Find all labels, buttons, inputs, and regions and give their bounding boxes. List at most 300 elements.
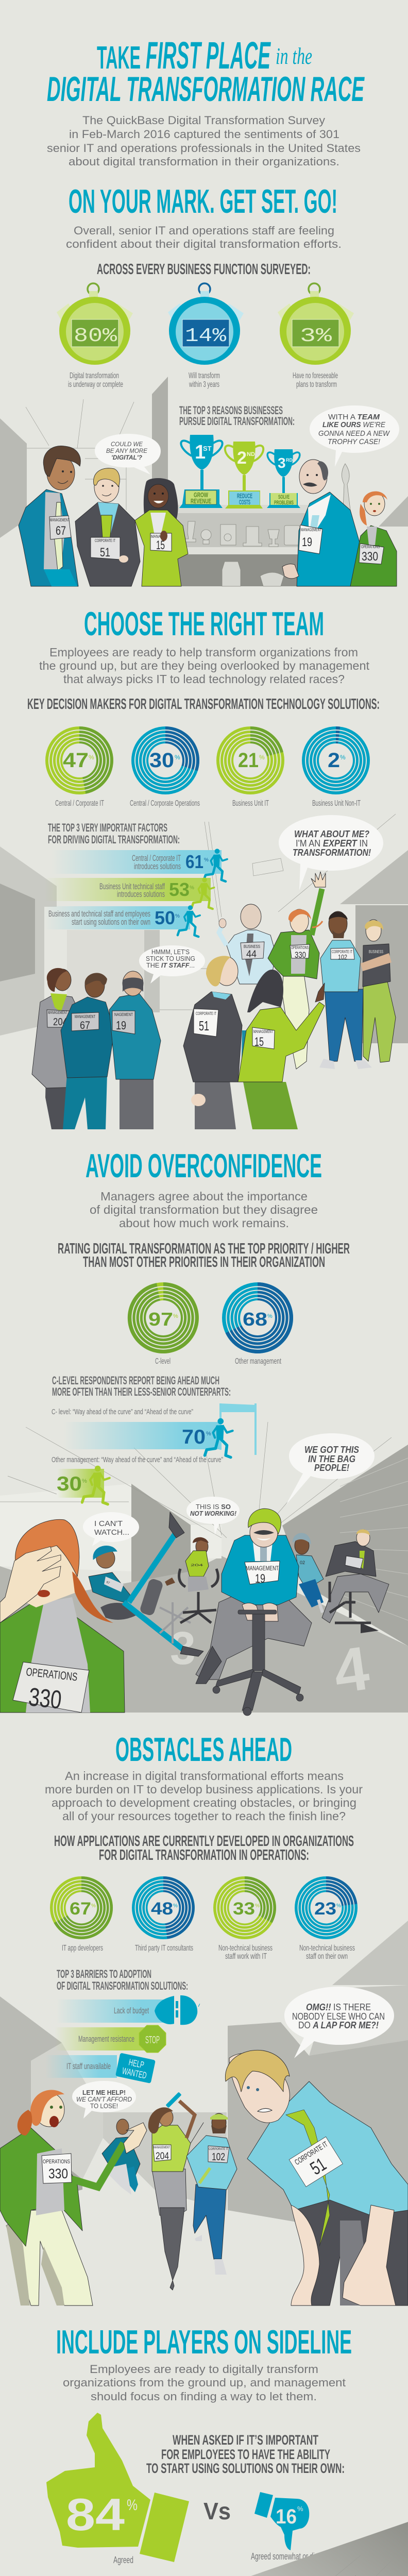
chart: priority donuts <box>128 1282 293 1366</box>
badge 19 <box>299 525 322 554</box>
badge 44: 44 <box>246 949 257 960</box>
badge 51 <box>194 1009 218 1037</box>
bar: other management 30 percent: % <box>82 1478 87 1484</box>
donut labels: Business Unit Non-IT <box>312 799 361 808</box>
heading: top 3 reasons <box>179 404 295 428</box>
character: falling racer 67: 67 <box>106 1581 110 1585</box>
badge 19 <box>245 1561 280 1586</box>
text block: employees ready: Employees are ready to help transform organizations from <box>49 646 358 659</box>
badge 15 <box>150 533 172 552</box>
speech bubble: so not working: NOT WORKING! <box>190 1510 236 1517</box>
bar: business unit 53 percent: Business Unit technical staff <box>99 882 165 891</box>
panel: office chair race illustration <box>0 1403 408 1716</box>
speech bubble: can't watch: I CAN'T <box>94 1519 123 1528</box>
thumb labels: Agreed <box>113 2555 133 2565</box>
thumb labels: Agreed somewhat or disagreed <box>251 2551 337 2562</box>
badge 44 <box>241 942 264 960</box>
stopwatch 80 percent: 80% <box>74 325 117 347</box>
character: back view 204 <box>32 968 78 1129</box>
donut 30 percent: % <box>175 754 180 761</box>
corridor background <box>0 1422 408 1713</box>
badge 204: 204 <box>156 2151 169 2162</box>
badge 44: BUSINESS <box>244 944 260 949</box>
title: FIRST PLACE <box>146 34 271 77</box>
badge 67 <box>49 516 71 539</box>
donut 33 percent: % <box>255 1903 260 1909</box>
badge 330: 330 <box>295 950 306 960</box>
donut 47 percent: % <box>89 754 94 761</box>
bar: other management 30 percent <box>52 1455 223 1504</box>
badge 19: MANAGEMENT <box>301 528 321 532</box>
badge 330: OPERATIONS <box>361 545 380 549</box>
floor number three: 3 <box>170 1623 196 1674</box>
donut 2 percent: 2 <box>328 749 340 772</box>
icon: thumbs up 84 percent: % <box>127 2497 138 2514</box>
character: manager 19 <box>282 460 362 586</box>
badge 51: 51 <box>100 546 110 560</box>
character: racer 102 <box>293 1533 324 1613</box>
bar: central IT 61 percent: Central / Corporate IT <box>132 853 181 863</box>
text block: employees digitally transform: should focus on finding a way to let them. <box>91 2390 317 2403</box>
speech bubble: stick to IT staff: STICK TO USING <box>146 955 195 962</box>
speech bubble: team like ours <box>310 405 399 467</box>
bar: central IT 61 percent: % <box>204 857 209 863</box>
stopwatch 3 percent: 3% <box>300 325 332 347</box>
text block: managers agree: of digital transformation but they disagree <box>90 1203 318 1216</box>
donut 48 percent: 48 <box>151 1899 173 1919</box>
speech bubble: OMG: OMG!! IS THERE <box>306 2002 371 2012</box>
badge 330: 330 <box>27 1682 63 1715</box>
donut 97 percent <box>128 1282 199 1353</box>
character: racer 102: 02 <box>300 1560 305 1565</box>
character: back view 51 <box>183 956 242 1129</box>
trophy 2nd: 2 <box>237 448 247 468</box>
bar: business unit 53 percent: % <box>190 885 194 891</box>
stopwatch labels <box>68 371 338 389</box>
speech bubble: team like ours: LIKE OURS WE'RE <box>322 420 386 429</box>
character: racer 204: 204 <box>191 1564 204 1567</box>
character: back view 15 <box>238 970 325 1129</box>
donut 2 percent <box>302 726 370 794</box>
speech bubble: got this in the bag <box>286 1433 375 1505</box>
bar: lack of budget: Lack of budget <box>114 2006 149 2015</box>
bar: management resistance <box>55 2025 166 2053</box>
speech bubble: let me help <box>72 2081 136 2119</box>
stopwatch labels: is underway or complete <box>68 380 123 389</box>
application labels: staff on their own <box>306 1952 348 1961</box>
donut labels <box>55 799 361 808</box>
badge 19: 19 <box>116 1019 126 1032</box>
subheading: rating digital transformation <box>58 1241 350 1270</box>
badge 330: OPERATIONS <box>43 2159 70 2165</box>
badge 51: CORPORATE IT <box>293 2140 329 2167</box>
badge 67 <box>72 1012 99 1031</box>
character: operations 330 waving <box>268 872 326 1069</box>
badge 19: 19 <box>302 535 312 549</box>
heading: C-level respondents <box>52 1374 231 1398</box>
priority labels <box>155 1357 281 1366</box>
trophy 2nd <box>225 442 263 509</box>
speech bubble: so not working <box>186 1497 240 1535</box>
subheading: how applications are developed <box>54 1833 354 1863</box>
bar: C-level 70 percent: 70 <box>182 1426 206 1448</box>
badge 19: 19 <box>255 1572 265 1586</box>
donut 68 percent: 68 <box>243 1309 267 1330</box>
donut 23 percent <box>295 1876 358 1939</box>
bar: employees 50 percent: % <box>175 913 180 919</box>
donut 23 percent: % <box>336 1903 341 1909</box>
character: manager 44 <box>219 904 276 1082</box>
heading: top 3 barriers: TOP 3 BARRIERS TO ADOPTION <box>57 1968 151 1980</box>
subheading: when asked: WHEN ASKED IF IT’S IMPORTANT <box>173 2432 318 2448</box>
application labels <box>62 1944 355 1961</box>
thumb labels <box>113 2551 337 2565</box>
intro text block: The QuickBase Digital Transformation Survey <box>82 114 325 127</box>
donut 97 percent: % <box>173 1313 178 1319</box>
badge 19: MANAGEMENT <box>246 1565 279 1572</box>
icon: thumbs down 16 percent: 16 <box>276 2505 297 2528</box>
lounge background <box>11 2522 408 2576</box>
icon: help wanted sign <box>115 2053 156 2083</box>
icon: help wanted sign: WANTED <box>121 2065 147 2081</box>
speech bubble: stick to IT staff: THE IT STAFF... <box>146 962 195 969</box>
speech bubble: stick to IT staff <box>139 945 205 984</box>
panel: trophy room illustration <box>0 377 408 586</box>
icon: thumbs up 84 percent: 84 <box>66 2489 125 2540</box>
badge 330 <box>290 944 310 960</box>
badge 330: OPERATIONS <box>25 1665 78 1683</box>
badge 204: MANAGEMENT <box>154 2146 170 2149</box>
intro text block: in Feb-March 2016 captured the sentiments of 301 <box>69 128 339 141</box>
bar: C-level 70 percent <box>52 1403 257 1458</box>
title <box>47 34 365 109</box>
heading: top 3 factors: FOR DRIVING DIGITAL TRANSFORMATION: <box>48 833 180 846</box>
panel: office illustration with factors <box>0 814 408 1129</box>
speech bubble: can't watch: WATCH... <box>94 1528 129 1537</box>
character: racer 204 with baton <box>148 2092 203 2290</box>
text block: managers agree: Managers agree about the importance <box>100 1190 308 1203</box>
speech bubble: could we: BE ANY MORE <box>106 447 148 454</box>
stopwatch 14 percent <box>168 283 244 365</box>
heading: top 3 factors: THE TOP 3 VERY IMPORTANT FACTORS <box>48 821 167 834</box>
badge 204: 204 <box>53 1016 67 1028</box>
badge 67: MANAGEMENT <box>75 1014 95 1019</box>
room background <box>0 377 408 586</box>
character: manager 67 <box>19 446 80 586</box>
character: business 117 <box>361 920 396 1062</box>
icon: thumbs up 84 percent <box>46 2413 189 2562</box>
speech bubble: what about me <box>279 815 383 890</box>
donut 33 percent <box>213 1876 276 1939</box>
speech bubble: let me help: TO LOSE! <box>90 2102 118 2110</box>
badge 51 <box>91 537 120 560</box>
text block: managers agree: about how much work remains. <box>119 1216 289 1230</box>
heading: top 3 reasons: THE TOP 3 REASONS BUSINESSES <box>179 404 283 417</box>
icon: blue runner <box>204 849 227 882</box>
subheading: when asked <box>146 2432 345 2476</box>
bar: employees 50 percent: 50 <box>155 907 175 928</box>
panel: relay race illustration with barriers <box>0 1921 408 2306</box>
speech bubble: so not working: THIS IS SO <box>196 1503 231 1511</box>
character: corporate IT 102 <box>319 911 372 1069</box>
character: small racer 67 <box>102 2119 140 2195</box>
trophy 1st <box>179 435 223 508</box>
bar: employees 50 percent <box>44 905 200 937</box>
heading: top 3 reasons: PURSUE DIGITAL TRANSFORMATION: <box>179 415 295 428</box>
badge 19 <box>112 1011 135 1034</box>
application labels: staff work with IT <box>225 1952 267 1961</box>
donut labels: Central / Corporate Operations <box>130 799 200 808</box>
character: business 117: BUSINESS <box>369 950 383 954</box>
stopwatch labels: Have no foreseeable <box>293 371 338 380</box>
text block: employees digitally transform: Employees are ready to digitally transform <box>90 2363 318 2376</box>
trophy 1st: ST <box>203 445 212 452</box>
icon: green runner <box>82 1466 110 1504</box>
speech bubble: team like ours: TROPHY CASE! <box>328 437 381 446</box>
application labels: Non-technical business <box>299 1944 355 1953</box>
donut 47 percent <box>45 726 113 794</box>
donut 23 percent: 23 <box>314 1899 336 1919</box>
speech bubble: got this in the bag: IN THE BAG <box>308 1454 355 1464</box>
character: manager 15 <box>135 478 188 586</box>
intro text block: about digital transformation in their organizations. <box>69 155 339 168</box>
character: racer 102 with baton <box>186 2113 237 2275</box>
priority labels: C-level <box>155 1357 171 1366</box>
bar: business unit 53 percent: 53 <box>169 879 190 900</box>
speech bubble: OMG: DO A LAP FOR ME?! <box>298 2020 379 2030</box>
badge 15: 15 <box>254 1035 264 1049</box>
trophy 1st: REVENUE <box>191 497 211 505</box>
badge 204 <box>153 2145 171 2162</box>
badge 330: 330 <box>362 550 378 564</box>
bar: C-level 70 percent: % <box>206 1431 211 1437</box>
donut 21 percent <box>216 726 284 794</box>
text block: employees ready <box>39 646 370 686</box>
donut 33 percent: 33 <box>233 1899 255 1919</box>
bar: business unit 53 percent <box>44 877 214 909</box>
badge 51 <box>289 2137 343 2187</box>
heading: C-level respondents: C-LEVEL RESPONDENTS REPORT BEING AHEAD MUCH <box>52 1374 219 1387</box>
title: TAKE <box>97 40 141 76</box>
stopwatch labels: plans to transform <box>296 380 337 389</box>
character: corporate IT 51 <box>75 468 140 586</box>
trophy 1st: GROW <box>194 491 208 499</box>
heading: top 3 barriers <box>57 1968 188 1992</box>
badge 15: 15 <box>156 538 165 552</box>
text block: confidence: confident about their digital transformation efforts. <box>66 238 342 250</box>
chart: agreement thumbs <box>46 2413 337 2565</box>
finish line banner <box>219 1403 257 1455</box>
speech bubble: team like ours: GONNA NEED A NEW <box>318 429 390 438</box>
intro text block: senior IT and operations professionals in the United States <box>47 142 361 155</box>
bar: business unit 53 percent: introduces solutions <box>117 889 165 899</box>
chart: application development donuts <box>50 1876 358 1961</box>
badge 67: 67 <box>80 1020 90 1031</box>
donut 68 percent <box>222 1282 293 1353</box>
priority labels: Other management <box>235 1357 281 1366</box>
speech bubble: team like ours: WITH A TEAM <box>328 413 380 421</box>
text block: employees ready: the ground up, but are they being overlooked by management <box>39 659 370 672</box>
speech bubble: let me help: WE CAN'T AFFORD <box>76 2095 132 2103</box>
icon: blue runner <box>205 1418 233 1458</box>
icon: stop sign: STOP <box>145 2035 160 2046</box>
character: back view 19 <box>109 971 161 1129</box>
badge 330 <box>42 2154 72 2183</box>
text block: employees ready: that always picks IT to lead technology related races? <box>63 672 345 686</box>
text block: obstacles: approach to development creating obstacles, or bringing <box>52 1796 356 1809</box>
badge 15: MANAGE <box>151 534 165 539</box>
icon: broken piggy bank <box>155 1995 200 2025</box>
hallway background <box>0 1921 408 2241</box>
badge 102: 102 <box>338 953 347 961</box>
character: racer 19 <box>196 1509 312 1716</box>
text block: confidence <box>66 224 342 250</box>
bar: central IT 61 percent: introduces solutions <box>134 861 181 871</box>
character: operations 330 <box>350 492 397 586</box>
character: racer 51 <box>322 1529 389 1633</box>
donut 48 percent <box>132 1876 195 1939</box>
trophy 2nd: REDUCE <box>237 492 252 500</box>
text block: employees digitally transform: organizations from the ground up, and management <box>63 2376 346 2389</box>
text block: obstacles: An increase in digital transformational efforts means <box>65 1769 344 1783</box>
panel: sideline illustration <box>0 2522 408 2576</box>
trophy 1st: 1 <box>195 442 206 463</box>
badge 15 <box>252 1027 275 1049</box>
character: operations 330 covering face <box>0 1519 125 1715</box>
icon: stop sign <box>139 2025 166 2053</box>
donut 68 percent: % <box>267 1313 273 1319</box>
badge 67: 67 <box>56 524 66 538</box>
icon: blue runner <box>178 905 200 937</box>
badge 51: CORPORATE IT <box>95 538 115 543</box>
badge 102 <box>331 948 354 961</box>
speech bubble: what about me: I'M AN EXPERT IN <box>296 838 368 849</box>
floor number four: 4 <box>330 1633 373 1706</box>
donut 21 percent: 21 <box>238 749 259 772</box>
stopwatch 3 percent <box>278 283 354 365</box>
application labels: Non-technical business <box>218 1944 273 1953</box>
speech bubble: what about me: TRANSFORMATION! <box>293 848 371 858</box>
stopwatch labels: Will transform <box>189 371 220 380</box>
donut 47 percent: 47 <box>63 749 89 772</box>
donut 2 percent: % <box>340 754 346 761</box>
bar: other management 30 percent: Other management: “Way ahead of the curve” and “Ahead of the curve” <box>52 1455 223 1464</box>
character: operations 330 running <box>0 2090 147 2306</box>
badge 102: CORPORATE IT <box>332 950 352 954</box>
intro text block <box>47 114 361 168</box>
character: back view 67 <box>61 973 114 1129</box>
stopwatch labels: within 3 years <box>189 380 219 389</box>
bar: central IT 61 percent <box>52 849 227 882</box>
speech bubble: can't watch <box>83 1512 139 1546</box>
character: falling racer 67 <box>89 1512 203 1656</box>
speech bubble: let me help: LET ME HELP! <box>82 2089 126 2096</box>
versus label: Vs <box>203 2498 231 2524</box>
badge 51: 51 <box>307 2154 330 2179</box>
heading: top 3 barriers: OF DIGITAL TRANSFORMATION SOLUTIONS: <box>57 1979 188 1992</box>
trophy 3rd: PROBLEMS <box>274 500 294 506</box>
trophy 3rd: RD <box>286 457 293 463</box>
stopwatch labels: Digital transformation <box>70 371 119 380</box>
bar: other management 30 percent: 30 <box>57 1473 82 1495</box>
donut labels: Business Unit IT <box>232 799 269 808</box>
office background <box>0 814 408 1043</box>
badge 204: MANAGEMENT <box>48 1010 67 1015</box>
trophy 3rd <box>267 449 300 508</box>
trophy 3rd: SOLVE <box>278 494 290 500</box>
icon: green runner <box>192 877 214 909</box>
bar: IT staff unavailable <box>45 2053 156 2083</box>
heading: top 3 factors <box>48 821 180 846</box>
badge 67: MANAGEMENT <box>50 518 70 522</box>
speech bubble: got this in the bag: WE GOT THIS <box>304 1445 359 1455</box>
badge 102: 102 <box>212 2151 225 2163</box>
text block: obstacles <box>45 1769 363 1823</box>
speech bubble: what about me: WHAT ABOUT ME? <box>294 829 369 839</box>
badge 330 <box>359 544 384 564</box>
trophy 2nd: COSTS <box>239 498 250 506</box>
badge 204 <box>47 1010 69 1028</box>
text block: obstacles: all of your resources together to reach the finish line? <box>62 1809 346 1823</box>
icon: thumbs down 16 percent: % <box>297 2505 303 2513</box>
bar: employees 50 percent: start using solutions on their own <box>72 917 150 927</box>
shelf awards <box>185 464 350 586</box>
donut 48 percent: % <box>173 1903 178 1909</box>
office chair <box>213 1610 303 1716</box>
stopwatch 14 percent: 14% <box>185 325 226 347</box>
character: exhausted corporate IT 51 <box>225 2050 408 2306</box>
badge 102: CORPORATE IT <box>209 2147 228 2151</box>
badge 51: CORPORATE IT <box>196 1011 216 1016</box>
donut 21 percent: % <box>259 754 265 761</box>
application labels: Third party IT consultants <box>135 1944 193 1953</box>
title: in the <box>276 43 312 69</box>
speech bubble: could we: 'DIGITAL'? <box>111 454 143 461</box>
bar: employees 50 percent: Business and technical staff and employees <box>48 909 150 919</box>
trophy 3rd: 3 <box>278 455 286 471</box>
badge 102 <box>208 2146 229 2163</box>
text block: employees digitally transform <box>63 2363 346 2403</box>
badge 330: OPERATIONS <box>291 945 309 950</box>
icon: thumbs down 16 percent <box>254 2492 309 2550</box>
panel: stopwatches <box>57 283 354 389</box>
badge 19: NAGEMENT <box>114 1012 133 1017</box>
text block: managers agree <box>90 1190 318 1230</box>
speech bubble: got this in the bag: PEOPLE! <box>314 1463 349 1473</box>
donut 97 percent: 97 <box>148 1309 173 1330</box>
badge 15: MANAGEMENT <box>253 1029 273 1034</box>
donut 67 percent <box>50 1876 113 1939</box>
heading: C-level respondents: MORE OFTEN THAN THEIR LESS-SENIOR COUNTERPARTS: <box>52 1385 231 1398</box>
speech bubble: OMG <box>284 1987 394 2058</box>
donut labels: Central / Corporate IT <box>55 799 104 808</box>
icon: help wanted sign: HELP <box>128 2057 145 2070</box>
donut 30 percent <box>131 726 199 794</box>
speech bubble: could we <box>95 434 161 474</box>
text block: obstacles: more burden on IT to develop business applications. Is your <box>45 1783 363 1796</box>
bar: lack of budget <box>56 1995 200 2025</box>
text block: confidence: Overall, senior IT and operations staff are feeling <box>74 224 334 237</box>
badge 330: 330 <box>48 2166 68 2181</box>
bar: C-level 70 percent: C- level: “Way ahead of the curve” and “Ahead of the curve” <box>52 1408 193 1416</box>
bar: IT staff unavailable: IT staff unavailable <box>66 2061 111 2071</box>
donut 67 percent: 67 <box>70 1899 91 1919</box>
character: racer 204 <box>179 1537 218 1623</box>
badge 51: 51 <box>199 1018 209 1033</box>
bar: central IT 61 percent: 61 <box>185 851 203 872</box>
speech bubble: stick to IT staff: HMMM, LET'S <box>151 948 190 956</box>
speech bubble: could we: COULD WE <box>111 440 143 448</box>
